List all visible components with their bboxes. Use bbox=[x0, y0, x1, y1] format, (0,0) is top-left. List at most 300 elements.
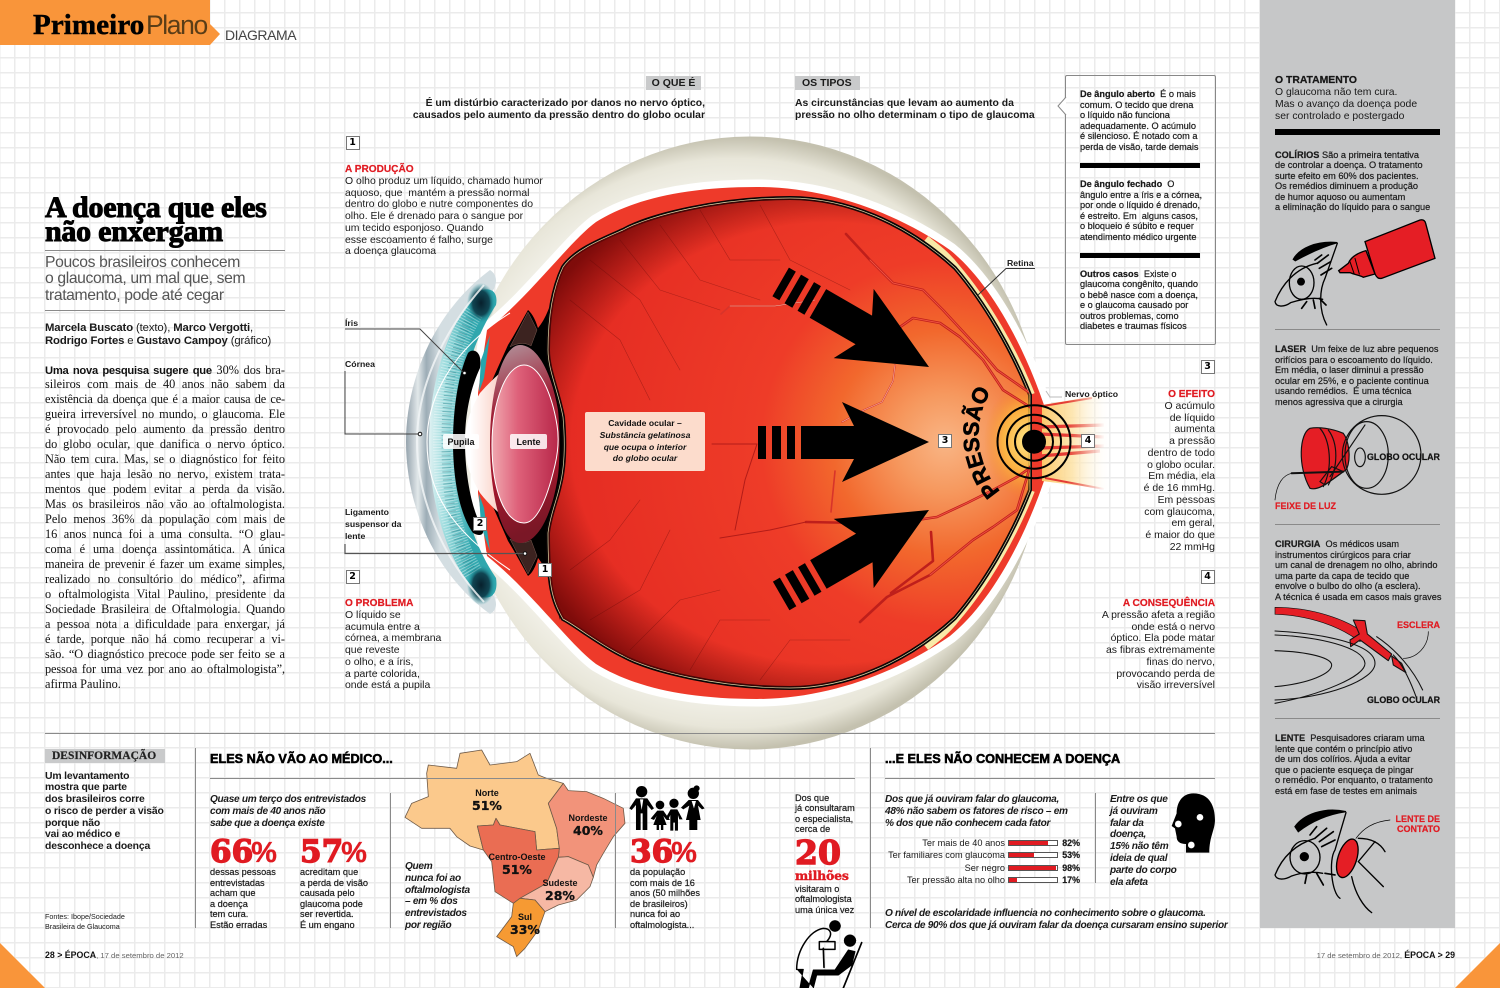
lens label: Lente bbox=[516, 437, 541, 447]
text: lente: de um dos colírios. Ajuda a evitar bbox=[1275, 754, 1410, 764]
stat text 36: da população bbox=[630, 867, 685, 877]
pressure target rings bbox=[998, 405, 1070, 478]
bar chart: fatores: Ter pressão alta no olho bbox=[907, 875, 1005, 885]
panel: tipos de glaucoma: o líquido não funciona bbox=[1080, 110, 1170, 120]
intro: fatores de risco: % dos que não conhecem cada fator bbox=[885, 818, 1050, 829]
label: optic nerve: Nervo óptico bbox=[1065, 389, 1118, 399]
text: o problema: o olho, e a íris, bbox=[345, 657, 413, 668]
pressure word: PRESSÃO bbox=[961, 387, 1000, 500]
text: colírios: de controlar a doença. O tratamento bbox=[1275, 160, 1423, 170]
text: o efeito: O acúmulo bbox=[1165, 401, 1215, 412]
stat 57%: 57% bbox=[300, 834, 367, 870]
stat text 66: acham que bbox=[210, 888, 255, 898]
section: o que é: É um distúrbio caracterizado por danos no nervo óptico, bbox=[426, 98, 705, 109]
badge 3: 3 bbox=[1204, 361, 1211, 372]
badge 2: 2 bbox=[349, 570, 356, 582]
panel: tipos de glaucoma: o bloqueio é súbito e requer bbox=[1080, 221, 1194, 231]
section: os tipos bbox=[795, 76, 1035, 121]
pressure arrow: bottom bbox=[761, 475, 949, 630]
eye badge 4 bbox=[1081, 434, 1095, 448]
intro: fatores de risco: Dos que já ouviram falar do glaucoma, bbox=[885, 794, 1059, 805]
text: laser: usando remédios. É uma técnica bbox=[1275, 386, 1411, 396]
map caption: – em % dos bbox=[405, 896, 458, 907]
stat 20 milhões bbox=[795, 833, 849, 883]
stat text 36: anos (50 milhões bbox=[630, 888, 700, 898]
section: o que é: causados pelo aumento da pressão dentro do globo ocular bbox=[413, 110, 705, 121]
map label: norte: 51% bbox=[472, 798, 502, 813]
cavity callout: que ocupa o interior bbox=[604, 442, 686, 452]
map caption: entrevistados bbox=[405, 908, 467, 919]
stat text 36: nunca foi ao bbox=[630, 909, 680, 919]
text: entre os que já ouviram: ela afeta bbox=[1110, 877, 1148, 888]
article body: realizado no consultório do médico”, afirma bbox=[45, 572, 285, 586]
stat text 57: a perda de visão bbox=[300, 878, 368, 888]
text: a produção: um tecido esponjoso. Quando bbox=[345, 223, 484, 234]
text: a produção: O olho produz um líquido, chamado humor bbox=[345, 176, 543, 187]
text: visitaram: visitaram o bbox=[795, 884, 839, 894]
footer right: 17 de setembro de 2012, ÉPOCA > 29 bbox=[1317, 950, 1455, 960]
badge 1: 1 bbox=[349, 136, 356, 148]
stat 66%: 66% bbox=[210, 834, 277, 870]
article body: a pessoa nota a dificuldade para enxergar, já bbox=[45, 617, 285, 631]
header tab: DIAGRAMA bbox=[225, 27, 296, 43]
map caption: oftalmologista bbox=[405, 885, 470, 896]
label: ligament: lente bbox=[345, 531, 365, 541]
text: o efeito: com glaucoma, bbox=[1144, 506, 1215, 518]
text: desinformação: vai ao médico e bbox=[45, 829, 120, 840]
panel: tipos de glaucoma: é silencioso. É notado com a bbox=[1080, 131, 1197, 141]
text: o problema: onde está a pupila bbox=[345, 680, 430, 691]
panel: tipos de glaucoma: perda de visão, tarde demais bbox=[1080, 142, 1198, 152]
panel: tipos de glaucoma: glaucoma congênito, quando bbox=[1080, 279, 1198, 289]
map label: centro-oeste bbox=[488, 852, 546, 877]
eye diagram bbox=[344, 136, 1436, 988]
text: cirurgia bbox=[1274, 539, 1442, 602]
text: o efeito: aumenta bbox=[1174, 424, 1215, 435]
stat text 57: causada pelo bbox=[300, 888, 355, 898]
subtitle: o glaucoma, um mal que, sem bbox=[45, 270, 245, 287]
text: o efeito: 22 mmHg bbox=[1170, 542, 1215, 553]
eye badge 2 bbox=[473, 517, 487, 531]
intro: fatores de risco: 48% não sabem os fatores de risco – em bbox=[885, 806, 1068, 817]
text: a consequência: as fibras extremamente bbox=[1106, 645, 1215, 656]
text: colírios: surte efeito em 60% dos pacientes. bbox=[1275, 171, 1419, 181]
text: lente: está em fase de testes em animais bbox=[1275, 786, 1417, 796]
text: o problema: córnea, a membrana bbox=[345, 633, 441, 644]
text: laser: ocular em 25%, e o paciente continua bbox=[1275, 376, 1429, 386]
cavity callout bbox=[585, 412, 705, 471]
panel: tipos de glaucoma: De ângulo aberto É o mais bbox=[1080, 89, 1196, 99]
text: cirurgia: instrumentos cirúrgicos para criar bbox=[1275, 550, 1411, 560]
optic nerve bbox=[1040, 393, 1112, 490]
label: ligament: Ligamento bbox=[345, 507, 389, 517]
article body: o oftalmologista Vital Paulino, presidente da bbox=[45, 587, 285, 601]
text: laser: menos agressiva que a cirurgia bbox=[1275, 397, 1403, 407]
intro: quase um terço: com mais de 40 anos não bbox=[210, 806, 325, 817]
subtitle: tratamento, pode até cegar bbox=[45, 287, 224, 304]
label line: optic nerve bbox=[1046, 391, 1062, 397]
panel: tipos de glaucoma: por onde o líquido é drenado, bbox=[1080, 200, 1200, 210]
label: lente de contato: CONTATO bbox=[1397, 824, 1440, 834]
stat text 36: com mais de 16 bbox=[630, 878, 695, 888]
stat text 66: a doença bbox=[210, 899, 248, 909]
article body: 16 anos nunca foi a uma consulta. “O glau- bbox=[45, 527, 285, 541]
text: colírios: Os remédios diminuem a produção bbox=[1275, 181, 1418, 191]
article body: pessoa for uma vez por ano ao oftalmologista”, bbox=[45, 662, 285, 676]
article body: Sociedade Brasileira de Oftalmologia. Quando bbox=[45, 602, 285, 616]
eye badge 2: 2 bbox=[477, 518, 483, 529]
article body: é provocado pelo aumento da pressão dentro bbox=[45, 422, 285, 436]
map caption: por região bbox=[405, 920, 451, 931]
bar chart: fatores: 82% bbox=[1062, 838, 1080, 848]
tratamento intro: O TRATAMENTO bbox=[1275, 75, 1357, 86]
label line: ligament bbox=[345, 544, 525, 554]
text: cirurgia: CIRURGIA Os médicos usam bbox=[1275, 539, 1399, 549]
text: a consequência: onde está o nervo bbox=[1131, 622, 1215, 632]
panel: tipos de glaucoma: e o glaucoma causado por bbox=[1080, 300, 1188, 310]
text: a produção: aquoso, que mantém a pressão normal bbox=[345, 188, 530, 198]
text: desinformação: Um levantamento bbox=[45, 770, 129, 782]
panel: tipos de glaucoma: diabetes e traumas físicos bbox=[1080, 321, 1187, 331]
heading: eles não vão ao médico: ELES NÃO VÃO AO MÉDICO... bbox=[210, 752, 393, 766]
text: escolaridade: Cerca de 90% dos que já ouviram falar da doença cursaram ensino superior bbox=[885, 920, 1227, 931]
bar chart: fatores: 53% bbox=[1062, 850, 1080, 860]
label: cornea: Córnea bbox=[345, 359, 375, 369]
text: laser: orifícios para o escoamento do líquido. bbox=[1275, 355, 1433, 365]
text: desinformação bbox=[45, 770, 164, 852]
label line: retina bbox=[978, 268, 1035, 295]
text: colírios: COLÍRIOS São a primeira tentativa bbox=[1275, 150, 1419, 160]
article body: gueira irreversível no mundo, o glaucoma. Ele bbox=[45, 407, 285, 421]
subtitle: Poucos brasileiros conhecem bbox=[45, 254, 240, 271]
main title: não enxergam bbox=[45, 214, 223, 248]
map label: nordeste: Nordeste bbox=[568, 813, 608, 823]
stat text 66: tem cura. bbox=[210, 909, 248, 919]
map label: sudeste: 28% bbox=[545, 888, 575, 903]
article body: afirma Paulino. bbox=[45, 677, 121, 691]
panel: tipos de glaucoma: ângulo entre a íris e a córnea, bbox=[1080, 190, 1202, 200]
map label: centro-oeste: Centro-Oeste bbox=[488, 852, 546, 862]
bar chart: fatores: Ter familiares com glaucoma bbox=[888, 850, 1005, 860]
text: o problema bbox=[345, 598, 442, 691]
tratamento intro bbox=[1275, 75, 1417, 122]
article body: sileiros com mais de 40 anos não sabem da bbox=[45, 377, 285, 391]
text: laser: LASER Um feixe de luz abre pequenos bbox=[1275, 344, 1438, 354]
stat text 66: entrevistadas bbox=[210, 878, 265, 888]
stat text 57: ser revertida. bbox=[300, 909, 354, 919]
text: colírios: de humor aquoso ou aumentam bbox=[1275, 192, 1405, 202]
text: escolaridade: O nível de escolaridade influencia no conhecimento sobre o glaucoma. bbox=[885, 908, 1206, 919]
text: a consequência: provocando perda de bbox=[1116, 668, 1215, 680]
eye badge 3 bbox=[938, 434, 952, 448]
stat text 66: dessas pessoas bbox=[210, 867, 276, 877]
stat text 36: oftalmologista... bbox=[630, 920, 694, 930]
text: entre os que já ouviram: 15% não têm bbox=[1110, 841, 1168, 852]
text: a consequência: visão irreversível bbox=[1137, 680, 1215, 691]
main title bbox=[44, 190, 267, 248]
text: lente bbox=[1275, 733, 1433, 796]
text: desinformação: desconhece a doença bbox=[45, 841, 150, 852]
text: o efeito: o globo ocular. bbox=[1147, 460, 1215, 470]
eye badge 1 bbox=[538, 563, 552, 577]
map label: sul bbox=[510, 912, 540, 937]
sclera bbox=[457, 136, 1043, 750]
lens bbox=[492, 365, 558, 523]
pressure arrow: top bbox=[761, 247, 949, 402]
tratamento intro: Mas o avanço da doença pode bbox=[1275, 99, 1417, 110]
text: laser: Em média, o laser diminui a pressão bbox=[1275, 365, 1424, 375]
intro: fatores de risco bbox=[884, 794, 1068, 829]
panel: tipos de glaucoma: adequadamente. O acúmulo bbox=[1080, 121, 1196, 131]
text: cirurgia: envolve o bulbo do olho (a esclera). bbox=[1275, 581, 1421, 591]
text: a consequência: finas do nervo, bbox=[1147, 657, 1215, 668]
text: o efeito bbox=[1144, 389, 1216, 553]
icon: family bbox=[629, 785, 705, 831]
pressure arrow: middle bbox=[758, 402, 929, 482]
badge 4 bbox=[1200, 570, 1214, 584]
badge 4: 4 bbox=[1204, 570, 1211, 582]
text: desinformação: o risco de perder a visão bbox=[45, 806, 164, 817]
icon: contact lens bbox=[1275, 810, 1390, 913]
section: os tipos: As circunstâncias que levam ao aumento da bbox=[795, 98, 1014, 109]
panel: tipos de glaucoma: De ângulo fechado O bbox=[1080, 179, 1174, 189]
panel: tipos de glaucoma: é estreito. Em alguns casos, bbox=[1080, 211, 1198, 221]
text: dos que já consultaram: o especialista, bbox=[795, 814, 853, 824]
map label: nordeste bbox=[568, 813, 608, 838]
cavity callout: do globo ocular bbox=[613, 453, 677, 463]
text: a produção bbox=[345, 162, 543, 257]
anterior chamber black area bbox=[470, 270, 568, 620]
label: globo ocular cirurgia: GLOBO OCULAR bbox=[1367, 694, 1440, 704]
text: entre os que já ouviram: falar da bbox=[1110, 818, 1144, 829]
map label: sudeste bbox=[542, 878, 578, 903]
text: o efeito: de líquido bbox=[1170, 412, 1215, 424]
text: visitaram: oftalmologista bbox=[795, 894, 852, 904]
main title: A doença que eles bbox=[45, 190, 267, 224]
text: o problema: a parte colorida, bbox=[345, 668, 420, 680]
text: entre os que já ouviram bbox=[1108, 794, 1176, 888]
text: colírios bbox=[1275, 150, 1430, 212]
stat text 36 bbox=[630, 867, 700, 930]
text: o efeito: O EFEITO bbox=[1168, 389, 1215, 400]
stat 20 milhões: milhões bbox=[795, 868, 849, 883]
stat text 66: Estão erradas bbox=[210, 920, 267, 930]
panel: tipos de glaucoma: comum. O tecido que drena bbox=[1080, 100, 1193, 110]
article body: Pelo menos 36% da população com mais de bbox=[45, 512, 285, 526]
label: globo ocular laser: GLOBO OCULAR bbox=[1367, 452, 1440, 462]
text: lente: que o paciente esqueça de pingar bbox=[1275, 765, 1413, 775]
cavity callout: Cavidade ocular – bbox=[608, 418, 682, 428]
text: a consequência: óptico. Ela pode matar bbox=[1111, 633, 1215, 644]
ciliary ligament bbox=[510, 312, 537, 574]
footer left: 28 > ÉPOCA, 17 de setembro de 2012 bbox=[45, 950, 184, 960]
stat text 57: acreditam que bbox=[300, 867, 358, 877]
header tab: Primeiro bbox=[33, 9, 144, 41]
map label: sudeste: Sudeste bbox=[542, 878, 578, 888]
sources: Brasileira de Glaucoma bbox=[45, 922, 120, 931]
badge 3 bbox=[1200, 360, 1214, 374]
section: o que é: O QUE É bbox=[652, 77, 695, 89]
text: o efeito: é de 16 mmHg. bbox=[1144, 483, 1215, 494]
icon: doctor and patient bbox=[797, 920, 862, 988]
stat text 57 bbox=[300, 867, 368, 930]
icon: eye with eye drops bbox=[1275, 220, 1435, 325]
map caption: Quem bbox=[405, 861, 432, 872]
bar chart: fatores: 98% bbox=[1062, 862, 1080, 872]
panel: tipos de glaucoma: Outros casos Existe o bbox=[1080, 268, 1177, 278]
icon: head bbox=[1172, 793, 1215, 853]
bar chart: fatores bbox=[888, 838, 1080, 885]
section: o que é bbox=[413, 76, 705, 121]
map label: norte: Norte bbox=[475, 788, 499, 798]
text: entre os que já ouviram: doença, bbox=[1110, 829, 1146, 840]
text: entre os que já ouviram: Entre os que bbox=[1110, 794, 1168, 805]
icon: laser bbox=[1275, 416, 1421, 500]
bar chart: fatores: Ser negro bbox=[965, 862, 1005, 872]
text: entre os que já ouviram: já ouviram bbox=[1110, 806, 1158, 817]
bar chart: fatores: Ter mais de 40 anos bbox=[922, 838, 1005, 848]
map label: sul: 33% bbox=[510, 922, 540, 937]
text: o problema: que reveste bbox=[345, 645, 400, 656]
text: o problema: O líquido se bbox=[345, 610, 401, 621]
text: cirurgia: uma parte da capa de tecido que bbox=[1275, 571, 1409, 581]
text: a consequência: A pressão afeta a região bbox=[1102, 610, 1215, 621]
badge 1 bbox=[346, 136, 360, 150]
article body: existência da doença que é a maior causa de ce- bbox=[45, 392, 285, 406]
intro: quase um terço bbox=[210, 794, 366, 829]
panel: tipos de glaucoma: o bebê nasce com a doença, bbox=[1080, 290, 1198, 300]
eye badge 1: 1 bbox=[542, 564, 548, 575]
panel: tipos de glaucoma bbox=[1065, 75, 1216, 345]
heading: e eles não conhecem: ...E ELES NÃO CONHECEM A DOENÇA bbox=[885, 752, 1120, 766]
map label: centro-oeste: 51% bbox=[502, 862, 532, 877]
tratamento intro: ser controlado e postergado bbox=[1275, 111, 1404, 122]
article body: é tarde, porque não há como recuperar a vi- bbox=[45, 632, 285, 646]
text: desinformação: dos brasileiros corre bbox=[45, 794, 145, 805]
black pupil crescent bbox=[453, 351, 483, 535]
text: dos que já consultaram bbox=[794, 792, 855, 834]
article body bbox=[45, 362, 285, 691]
map caption bbox=[404, 861, 470, 931]
text: escolaridade bbox=[885, 908, 1227, 932]
label: iris: Íris bbox=[345, 318, 358, 328]
article body: antes que haja lesão no nervo, existem trata- bbox=[45, 467, 285, 481]
text: dos que já consultaram: cerca de bbox=[795, 824, 830, 834]
stat text 36: de brasileiros) bbox=[630, 899, 688, 909]
panel: tratamento background bbox=[1260, 0, 1455, 928]
stat text 57: glaucoma pode bbox=[300, 899, 363, 909]
intro: quase um terço: sabe que a doença existe bbox=[210, 818, 325, 829]
red choroid layer bbox=[478, 187, 1044, 699]
text: dos que já consultaram: Dos que bbox=[795, 792, 829, 802]
label: retina: Retina bbox=[1007, 258, 1034, 268]
byline bbox=[45, 322, 271, 347]
bar chart: fatores: 17% bbox=[1062, 875, 1080, 885]
article body: mentos que podem evitar a perda da visão. bbox=[45, 482, 285, 496]
eye badge 4: 4 bbox=[1085, 435, 1091, 446]
text: a produção: dentro do globo e nutre componentes do bbox=[345, 199, 533, 210]
map label: norte bbox=[472, 788, 502, 813]
icon: surgery bbox=[1275, 607, 1428, 703]
aqueous chamber bbox=[465, 354, 525, 532]
text: cirurgia: um canal de drenagem no olho, abrindo bbox=[1275, 560, 1437, 570]
text: o problema: acumula entre a bbox=[345, 622, 420, 632]
text: a produção: olho. Ele é drenado para o sangue por bbox=[345, 211, 523, 222]
text: colírios: a eliminação do líquido para o sangue bbox=[1275, 202, 1430, 212]
text: visitaram bbox=[794, 884, 854, 915]
sources: Fontes: Ibope/Sociedade bbox=[45, 912, 125, 921]
stat text 66 bbox=[210, 867, 276, 930]
text: o efeito: em geral, bbox=[1171, 518, 1215, 529]
eye badge 3: 3 bbox=[942, 435, 948, 446]
article body: Uma nova pesquisa sugere que 30% dos bra- bbox=[45, 362, 285, 376]
pupil label bbox=[443, 434, 479, 449]
text: cirurgia: A técnica é usada em casos mais graves bbox=[1275, 592, 1441, 602]
text: o efeito: é maior do que bbox=[1145, 530, 1215, 541]
vitreous body bbox=[548, 198, 1068, 688]
cavity callout: Substância gelatinosa bbox=[600, 430, 690, 440]
section: desinformação: DESINFORMAÇÃO bbox=[52, 750, 156, 762]
text: o efeito: a pressão bbox=[1169, 436, 1215, 447]
map label: sul: Sul bbox=[518, 912, 532, 922]
label: lente de contato: LENTE DE bbox=[1395, 814, 1440, 824]
iris and cornea bbox=[406, 270, 510, 614]
byline: Marcela Buscato (texto), Marco Vergotti, bbox=[45, 322, 253, 334]
text: lente: o remédio. Por enquanto, o tratamento bbox=[1275, 775, 1433, 785]
text: laser bbox=[1275, 344, 1438, 408]
stat 20 milhões: 20 bbox=[795, 833, 841, 872]
section: os tipos: pressão no olho determinam o tipo de glaucoma bbox=[795, 110, 1035, 121]
text: entre os que já ouviram: parte do corpo bbox=[1110, 865, 1176, 876]
label line: iris bbox=[345, 329, 464, 373]
text: a consequência: A CONSEQUÊNCIA bbox=[1123, 598, 1215, 609]
lens label bbox=[510, 434, 547, 449]
text: a produção: a doença glaucoma bbox=[345, 246, 436, 257]
article body: são. “O diagnóstico precoce pode ser feito se a bbox=[45, 647, 285, 661]
text: o efeito: Em pessoas bbox=[1158, 495, 1215, 506]
text: desinformação: porque não bbox=[45, 818, 100, 829]
article body: Mas os brasileiros não vão ao oftalmologista. bbox=[45, 497, 285, 511]
label: ligament: suspensor da bbox=[345, 519, 402, 529]
badge 2 bbox=[346, 570, 360, 584]
text: lente: LENTE Pesquisadores criaram uma bbox=[1275, 733, 1425, 743]
retinal veins bbox=[570, 205, 1030, 680]
label: esclera: ESCLERA bbox=[1397, 620, 1440, 630]
label: feixe de luz: FEIXE DE LUZ bbox=[1275, 500, 1336, 510]
article body: Não tem cura. Mas, se o diagnóstico for feito bbox=[45, 452, 285, 466]
text: entre os que já ouviram: ideia de qual bbox=[1110, 853, 1167, 864]
sources bbox=[45, 912, 125, 931]
tratamento intro: O glaucoma não tem cura. bbox=[1275, 87, 1397, 98]
label: ligament bbox=[345, 507, 402, 541]
map caption: nunca foi ao bbox=[405, 873, 461, 884]
panel: tipos de glaucoma: atendimento médico urgente bbox=[1080, 232, 1196, 242]
article body: coma é uma doença assintomática. A única bbox=[45, 542, 285, 556]
map of Brazil bbox=[405, 750, 625, 957]
byline: Rodrigo Fortes e Gustavo Campoy (gráfico) bbox=[45, 335, 271, 347]
text: visitaram: uma única vez bbox=[795, 905, 854, 915]
label: lente de contato bbox=[1395, 814, 1440, 834]
article body: do globo ocular, que danifica o nervo óptico. bbox=[45, 437, 285, 451]
pupil label: Pupila bbox=[447, 437, 475, 447]
text: a produção: A PRODUÇÃO bbox=[345, 164, 414, 175]
label line: cornea bbox=[345, 371, 420, 434]
text: desinformação: mostra que parte bbox=[45, 782, 127, 793]
stat 36%: 36% bbox=[630, 834, 697, 870]
text: a consequência bbox=[1102, 596, 1215, 691]
text: o efeito: dentro de todo bbox=[1148, 448, 1215, 459]
text: o problema: O PROBLEMA bbox=[345, 598, 413, 609]
